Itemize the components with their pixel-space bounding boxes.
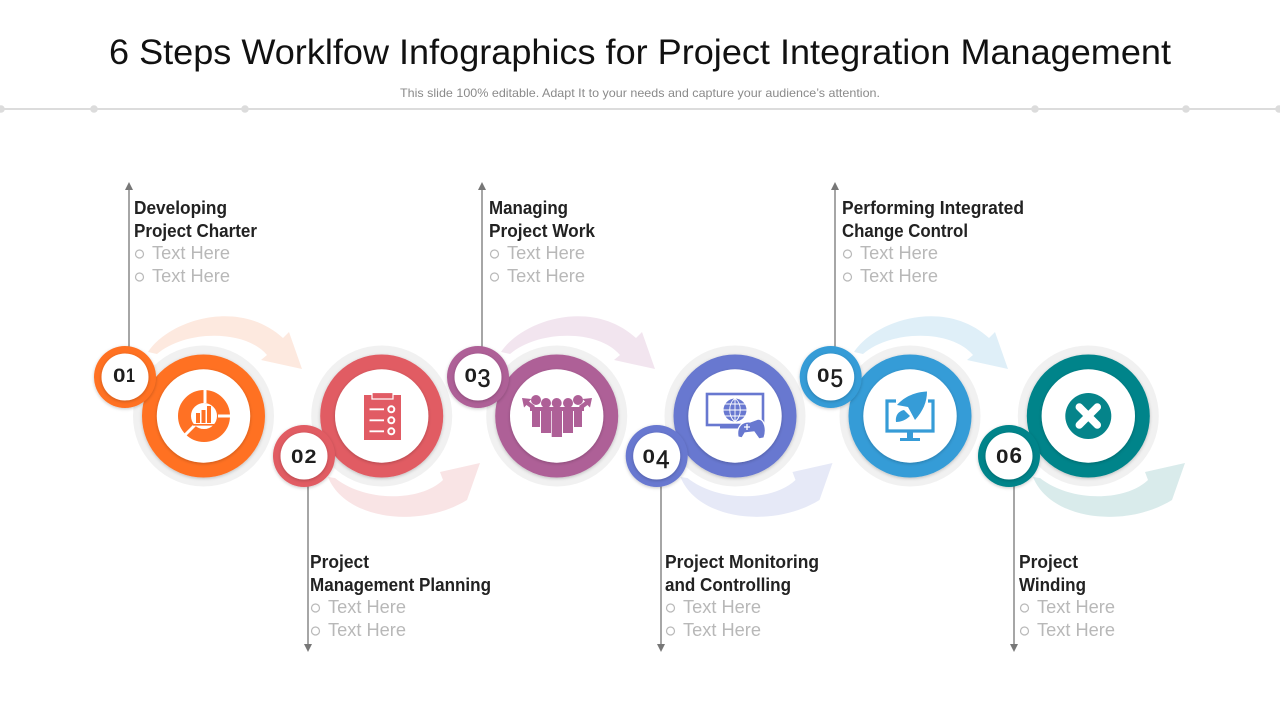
icon: donut chart [184, 388, 232, 436]
arrow: step 4 to 5 [680, 463, 832, 517]
connector: step 3 [478, 182, 486, 347]
badge 03: 0 [464, 366, 477, 387]
text block: step 6 [1019, 552, 1115, 640]
step 1 ring [133, 346, 274, 486]
text block: step 2: Text Here [328, 620, 406, 640]
text block: step 4: and Controlling [665, 575, 791, 595]
badge 03 [447, 346, 509, 408]
badge 05: 0 [817, 366, 830, 387]
text block: step 6: Text Here [1037, 620, 1115, 640]
step 5 ring [840, 346, 980, 486]
text block: step 1: Developing [134, 198, 227, 218]
arrow: step 5 to 6 [854, 316, 1008, 369]
text block: step 1: Project Charter [134, 221, 257, 241]
text block: step 3: Text Here [507, 243, 585, 263]
arrow: step 2 to 3 [328, 463, 480, 517]
header divider with dots [0, 105, 1280, 113]
badge 01: 0 [113, 366, 126, 387]
badge 02 [273, 425, 335, 487]
text block: step 4: Project Monitoring [665, 552, 819, 572]
text block: step 2: Project [310, 552, 369, 572]
badge 01 [94, 346, 156, 408]
text block: step 5: Change Control [842, 221, 968, 241]
text block: step 6: Project [1019, 552, 1078, 572]
step 6 ring [1018, 346, 1159, 486]
badge 01: 1 [126, 366, 135, 387]
arrow: step 1 to 2 [148, 316, 302, 369]
badge 06: 6 [1010, 443, 1022, 468]
badge 04: 4 [656, 446, 670, 474]
badge 04: 0 [642, 447, 655, 468]
arrow: step 6 out [1033, 463, 1185, 517]
text block: step 2 [310, 552, 491, 640]
step 3 ring [486, 346, 627, 486]
text block: step 5: Text Here [860, 266, 938, 286]
icon: clipboard checklist [364, 392, 401, 440]
text block: step 3: Project Work [489, 221, 596, 241]
badge 02: 2 [304, 447, 316, 468]
subtitle: This slide 100% editable. Adapt It to your needs and capture your audience’s attention. [400, 86, 880, 100]
text block: step 5: Performing Integrated [842, 198, 1024, 218]
text block: step 4: Text Here [683, 597, 761, 617]
text block: step 1: Text Here [152, 243, 230, 263]
text block: step 3: Managing [489, 198, 568, 218]
connector: step 1 [125, 182, 133, 347]
badge 05: 5 [830, 365, 843, 393]
badge 06 [978, 425, 1040, 487]
icon: monitor with globe and gamepad [707, 394, 765, 439]
icon: team with raised arrows [522, 395, 592, 437]
text block: step 6: Winding [1019, 575, 1086, 595]
text block: step 4 [665, 552, 819, 640]
icon: monitor with rocket [887, 392, 933, 441]
badge 02: 0 [291, 447, 304, 468]
text block: step 6: Text Here [1037, 597, 1115, 617]
connector: step 6 [1010, 486, 1018, 652]
text block: step 3 [489, 198, 596, 286]
text block: step 5: Text Here [860, 243, 938, 263]
text block: step 2: Text Here [328, 597, 406, 617]
connector: step 5 [831, 182, 839, 347]
arrow: step 3 to 4 [501, 316, 655, 369]
badge 04 [626, 425, 688, 487]
step 2 ring [311, 346, 452, 486]
connector: step 4 [657, 486, 665, 652]
connector: step 2 [304, 486, 312, 652]
text block: step 3: Text Here [507, 266, 585, 286]
text block: step 5 [842, 198, 1024, 286]
badge 03: 3 [478, 365, 490, 393]
icon: close circle [1065, 393, 1111, 439]
badge 05 [800, 346, 862, 408]
title: 6 Steps Worklfow Infographics for Project Integration Management [109, 33, 1171, 72]
text block: step 4: Text Here [683, 620, 761, 640]
step 4 ring [664, 346, 806, 486]
badge 06: 0 [996, 447, 1008, 468]
text block: step 2: Management Planning [310, 575, 491, 595]
text block: step 1: Text Here [152, 266, 230, 286]
text block: step 1 [134, 198, 257, 286]
